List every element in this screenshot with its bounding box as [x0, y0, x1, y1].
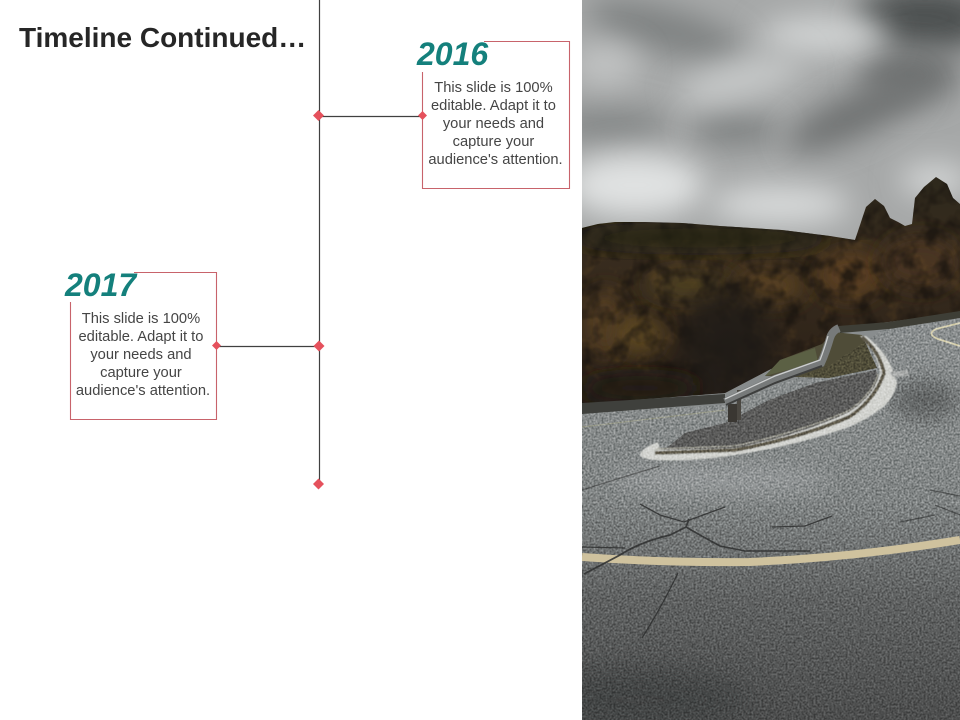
gravel median	[664, 370, 882, 452]
photo: winding road under cloudy sky	[582, 0, 960, 720]
2017 description: capture your	[100, 365, 182, 381]
sky	[550, 0, 960, 245]
2017 box marker	[212, 341, 221, 350]
road curb	[640, 336, 909, 460]
2017 axis marker	[314, 340, 324, 352]
road surface	[582, 300, 960, 720]
yellow road line	[582, 540, 960, 562]
2016 description: audience's attention.	[428, 152, 563, 168]
title: Timeline Continued…	[19, 22, 306, 53]
2016 description: your needs and	[443, 116, 544, 132]
2017 description: audience's attention.	[76, 383, 210, 399]
entry: 2016	[313, 36, 570, 188]
timeline end marker	[313, 478, 324, 490]
2016 axis marker	[313, 110, 324, 121]
road patches	[530, 380, 959, 720]
road edge line upper left	[582, 410, 725, 427]
road cracks	[582, 466, 960, 638]
timeline vertical axis	[318, 0, 320, 484]
asphalt grain	[582, 310, 960, 720]
road edge line upper right	[931, 323, 960, 346]
entry: 2017	[64, 267, 324, 420]
2017 description: your needs and	[90, 347, 192, 363]
2016 description: This slide is 100%	[434, 80, 553, 96]
2016 connector	[319, 116, 422, 118]
2017 box	[70, 272, 216, 420]
left guardrail	[582, 394, 725, 414]
2017 year: 2017	[64, 267, 138, 303]
2016 description: capture your	[453, 134, 534, 150]
2016 year: 2016	[416, 36, 488, 72]
grassy slope	[765, 332, 877, 378]
forest hillside	[582, 177, 960, 403]
2016 box marker	[418, 111, 427, 120]
2017 description: editable. Adapt it to	[78, 329, 203, 345]
main guardrail	[725, 328, 839, 422]
2016 description: editable. Adapt it to	[431, 98, 556, 114]
2016 box	[422, 42, 570, 188]
2017 connector	[216, 346, 319, 348]
far guardrail	[838, 311, 960, 333]
2017 description: This slide is 100%	[82, 311, 200, 327]
